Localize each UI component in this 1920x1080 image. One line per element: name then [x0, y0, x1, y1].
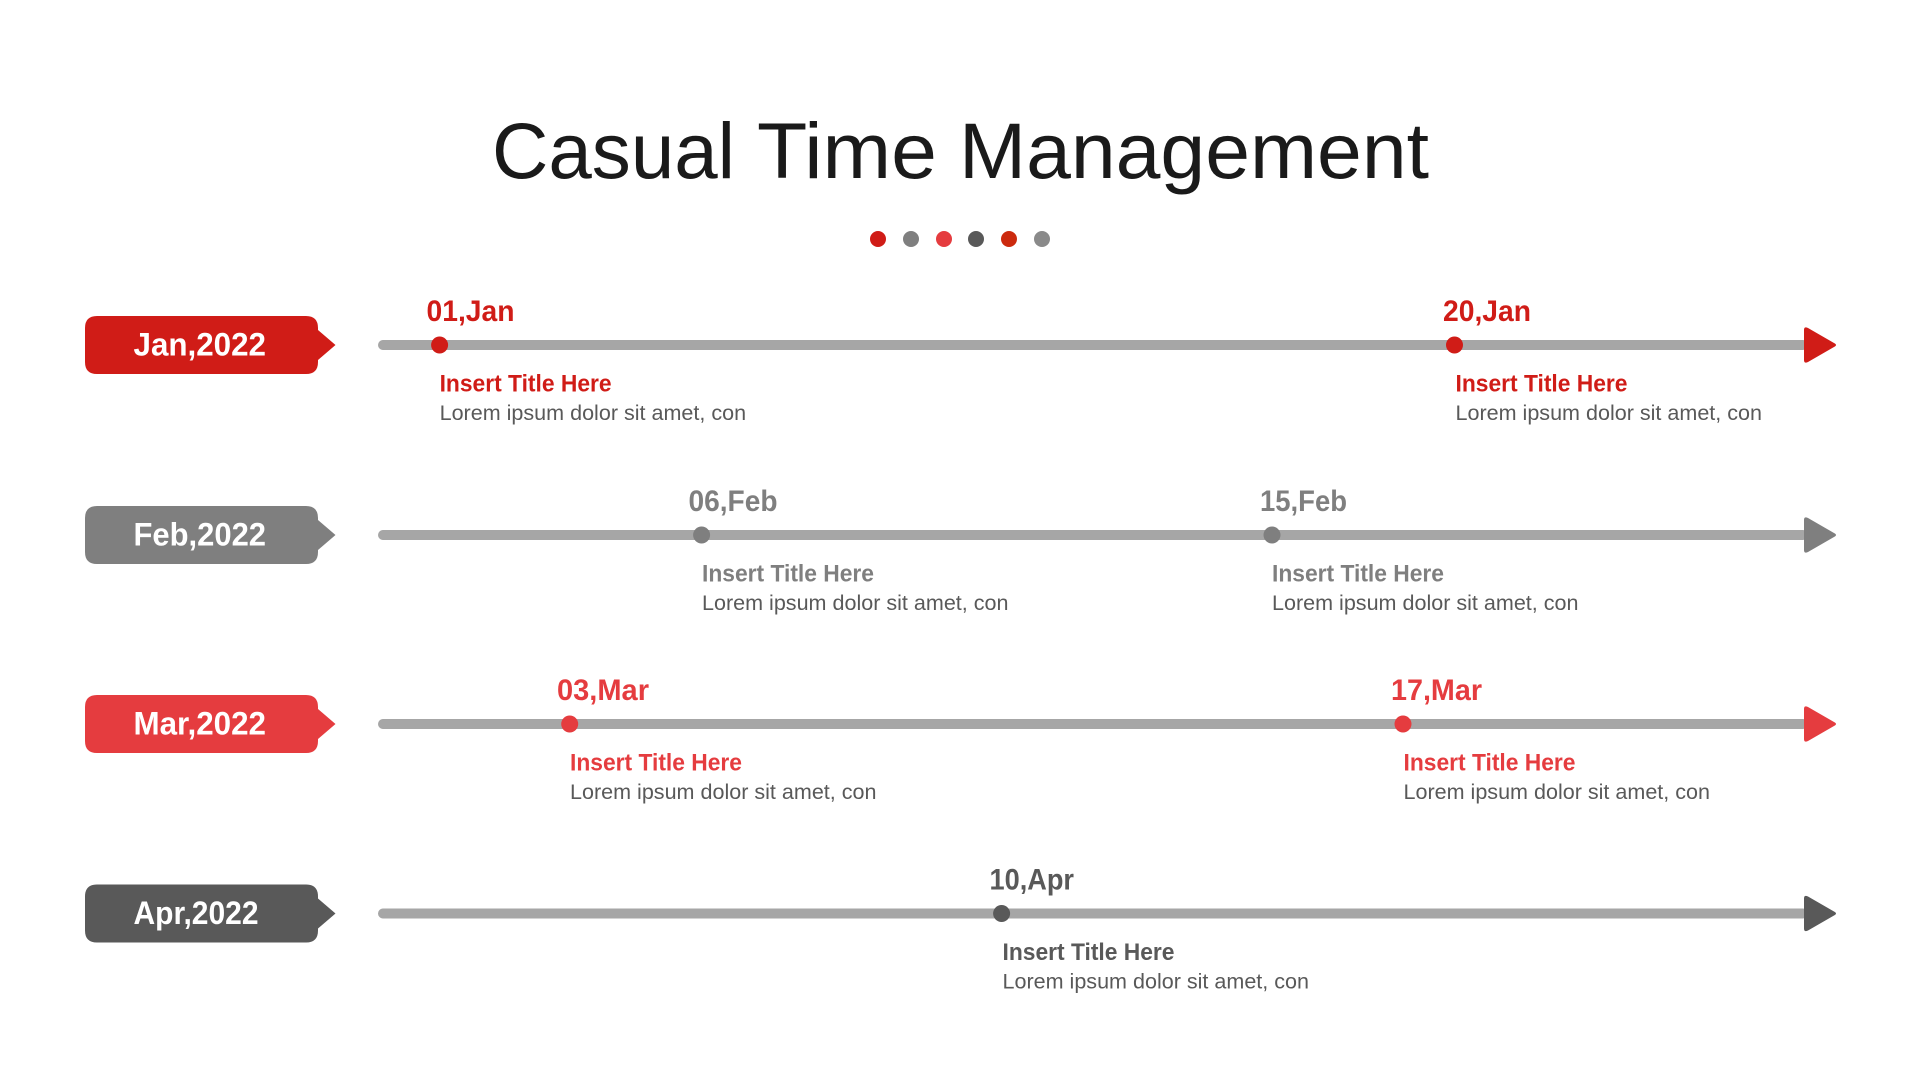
milestone: 01,Jan: [426, 295, 746, 425]
timeline bar: [378, 530, 1808, 540]
milestone: 10,Apr: Insert Title Here: [1002, 939, 1174, 966]
timeline bar: [378, 908, 1808, 918]
timeline bar: [378, 719, 1808, 729]
title: Management: [959, 106, 1429, 195]
milestone: 06,Feb: Lorem ipsum dolor sit amet, con: [702, 591, 1008, 615]
milestone: 17,Mar: Insert Title Here: [1404, 750, 1576, 776]
milestone: 20,Jan: Lorem ipsum dolor sit amet, con: [1456, 401, 1762, 425]
milestone: 03,Mar: [557, 674, 876, 804]
milestone: 01,Jan: 01,Jan: [426, 295, 514, 328]
decorative dot row under title: [870, 231, 1050, 247]
month badge: Feb,2022: [85, 506, 336, 564]
month badge: Apr,2022: Apr,2022: [134, 895, 258, 931]
title: Casual: [492, 106, 735, 195]
timeline row: March: [85, 674, 1836, 804]
arrow head: [1804, 896, 1836, 931]
timeline row: January: [85, 295, 1836, 425]
timeline row: April: [85, 864, 1836, 994]
month badge: Jan,2022: Jan,2022: [134, 326, 266, 362]
milestone: 03,Mar: Lorem ipsum dolor sit amet, con: [570, 780, 876, 804]
milestone: 15,Feb: Insert Title Here: [1272, 560, 1444, 588]
month badge: Jan,2022: [85, 316, 336, 374]
month badge: Mar,2022: [85, 695, 336, 753]
month badge: Apr,2022: [85, 884, 336, 942]
milestone: 03,Mar: Insert Title Here: [570, 750, 742, 776]
milestone: 20,Jan: Insert Title Here: [1456, 370, 1628, 398]
month badge: Feb,2022: Feb,2022: [134, 516, 266, 552]
milestone: 10,Apr: Lorem ipsum dolor sit amet, con: [1002, 970, 1309, 994]
milestone: 01,Jan: Lorem ipsum dolor sit amet, con: [440, 401, 746, 425]
milestone: 15,Feb: Lorem ipsum dolor sit amet, con: [1272, 591, 1578, 615]
milestone: 01,Jan: Insert Title Here: [440, 370, 612, 398]
milestone: 17,Mar: Lorem ipsum dolor sit amet, con: [1404, 780, 1710, 804]
milestone: 17,Mar: [1391, 674, 1710, 804]
milestone: 20,Jan: [1443, 295, 1762, 425]
arrow head: [1804, 706, 1836, 742]
milestone: 06,Feb: Insert Title Here: [702, 560, 874, 588]
timeline bar: [378, 340, 1808, 350]
milestone: 17,Mar: 17,Mar: [1391, 674, 1482, 707]
arrow head: [1804, 517, 1836, 553]
milestone: 03,Mar: 03,Mar: [557, 674, 649, 707]
month badge: Mar,2022: Mar,2022: [134, 706, 266, 742]
timeline row: February: [85, 485, 1836, 615]
milestone: 15,Feb: [1260, 485, 1578, 615]
milestone: 06,Feb: 06,Feb: [688, 485, 778, 518]
milestone: 06,Feb: [688, 485, 1008, 615]
milestone: 15,Feb: 15,Feb: [1260, 485, 1347, 518]
milestone: 20,Jan: 20,Jan: [1443, 295, 1531, 328]
title: Time: [757, 106, 937, 195]
milestone: 10,Apr: [990, 864, 1309, 994]
milestone: 10,Apr: 10,Apr: [990, 864, 1074, 896]
arrow head: [1804, 327, 1836, 363]
